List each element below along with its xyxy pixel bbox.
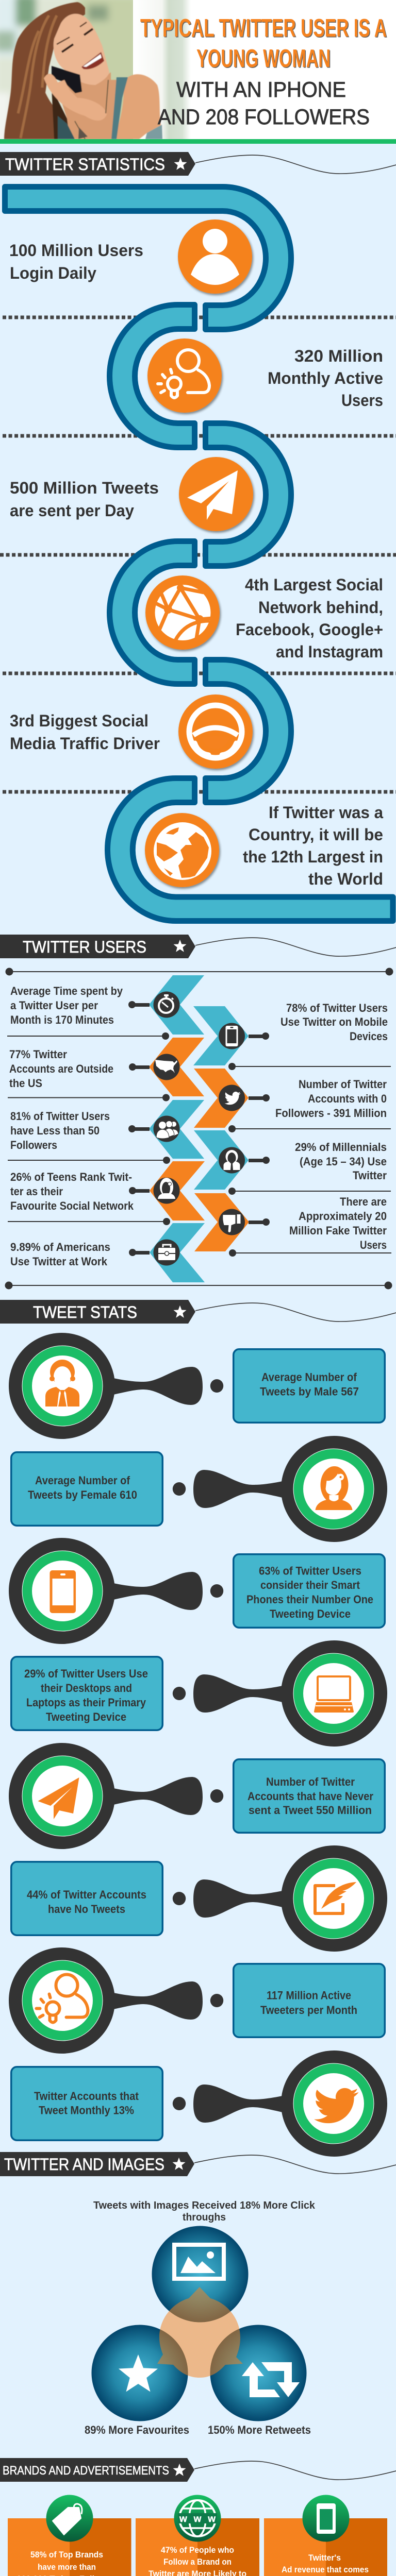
images headline: Tweets with Images Received 18% More Click	[93, 2200, 316, 2211]
text: no tweets: 44% of Twitter Accounts	[27, 1888, 146, 1901]
brand panel 2: 47% of People who	[161, 2545, 234, 2555]
stat: 500 million tweets: are sent per Day	[10, 501, 134, 520]
images labels: 150% More Retweets	[208, 2424, 311, 2436]
icon: price tag	[53, 2504, 82, 2535]
photo: woman on the phone	[0, 0, 162, 144]
icon: www globe	[178, 2500, 217, 2536]
user stats: left column: a Twitter User per	[10, 999, 98, 1012]
user stats: right column: Number of Twitter	[299, 1078, 387, 1091]
icon: person with bulb	[147, 338, 222, 413]
icon: retweet	[242, 2362, 300, 2397]
brand panel 3: Twitter's	[308, 2553, 341, 2563]
stat: 4th largest	[236, 575, 383, 661]
timeline top and bottom rules	[5, 969, 393, 1289]
user stats: right column: Use Twitter on Mobile	[280, 1015, 388, 1028]
brand panel 1: have more than	[38, 2562, 96, 2572]
text: desktop tweeting: Tweeting Device	[46, 1710, 126, 1723]
user stats: right column: Devices	[350, 1030, 388, 1043]
icon: network globe	[145, 575, 220, 650]
pan: accounts never tweeted	[9, 1743, 385, 1849]
pan: desktop tweeting	[11, 1640, 387, 1747]
icon: orange person with bulb	[36, 1974, 88, 2023]
user stats: left column: Accounts are Outside	[9, 1062, 113, 1075]
stat: if twitter was a country: If Twitter was a	[269, 803, 383, 822]
icon: teen girl	[154, 1178, 179, 1204]
icon: star	[119, 2354, 158, 2392]
section banner: twitter users	[0, 935, 396, 958]
pan: tweet monthly	[11, 2050, 387, 2157]
pan: smartphone tweeting	[9, 1538, 385, 1644]
icon: www globe: www	[179, 2514, 216, 2524]
pan: male tweets	[9, 1333, 385, 1439]
user stats: right column: Users	[360, 1239, 387, 1251]
text: smartphone tweeting: Phones their Number One	[246, 1593, 373, 1606]
text: active tweeters: 117 Million Active	[267, 1989, 351, 2002]
text: male tweets: Average Number of	[261, 1370, 357, 1384]
icon: image frame	[174, 2245, 224, 2279]
brand panel 3	[264, 2495, 387, 2576]
icon: phone	[50, 1570, 76, 1613]
stat: 320 million: Monthly Active	[268, 369, 383, 387]
icon: steering wheel	[178, 694, 253, 769]
images labels	[85, 2424, 311, 2436]
icon: group of users	[154, 1116, 179, 1142]
stat: if twitter was a country: the 12th Largest in	[243, 848, 383, 866]
user stats: left column: ter as their	[10, 1185, 63, 1198]
serpentine pipe	[5, 187, 393, 921]
stat: 3rd biggest	[10, 711, 160, 753]
brand panel 1	[8, 2495, 131, 2576]
user stats: left column: 9.89% of Americans	[10, 1241, 110, 1253]
icon: quill and page	[315, 1882, 356, 1913]
icon: orange twitter bird	[314, 2088, 358, 2123]
stat: 500 million tweets	[10, 479, 159, 520]
user stats: right column: Accounts with 0	[308, 1092, 387, 1105]
title: dark subheadline: AND 208 FOLLOWERS	[158, 105, 370, 129]
text: accounts never tweeted: sent a Tweet 550 Million	[249, 1804, 372, 1817]
user stats: left column: Use Twitter at Work	[10, 1255, 108, 1268]
text: female tweets	[28, 1474, 137, 1501]
text: female tweets: Tweets by Female 610	[28, 1488, 137, 1501]
user stats: right column: 78% of Twitter Users	[286, 1002, 388, 1014]
stat: if twitter was a country: the World	[308, 870, 383, 888]
text: smartphone tweeting: Tweeting Device	[270, 1607, 351, 1620]
text: accounts never tweeted	[248, 1775, 373, 1817]
user stats: right column: (Age 15 – 34) Use	[300, 1155, 387, 1168]
user stats: right column: There are	[340, 1195, 387, 1208]
stat: 100 million users: Login Daily	[10, 264, 96, 282]
section banner: brands and advertisements: BRANDS AND ADVERTISEMENTS	[3, 2464, 169, 2478]
user stats: left column: 77% Twitter	[9, 1048, 67, 1061]
user stats: right column: 29% of Millennials	[295, 1141, 387, 1154]
stat: 4th largest: and Instagram	[276, 642, 383, 661]
user stats: right column	[275, 1002, 388, 1251]
user stats: left column: Followers	[10, 1139, 57, 1151]
text: accounts never tweeted: Number of Twitter	[266, 1775, 355, 1788]
text: accounts never tweeted: Accounts that have Never	[248, 1790, 373, 1803]
stat: 3rd biggest: Media Traffic Driver	[10, 734, 160, 753]
text: active tweeters	[260, 1989, 357, 2016]
header	[0, 0, 396, 144]
images headline	[93, 2200, 316, 2223]
user stats: left column: the US	[9, 1077, 42, 1090]
section banner: brands and advertisements	[0, 2458, 396, 2482]
title: orange headline: YOUNG WOMAN	[196, 45, 331, 73]
stat: 320 million: 320 Million	[294, 347, 383, 365]
icon: paper plane	[179, 457, 253, 531]
user stats: left column: Favourite Social Network	[10, 1199, 134, 1212]
user stats: right column: Million Fake Twitter	[289, 1224, 387, 1237]
icon: millennial man	[219, 1147, 245, 1174]
user stats: left column: 81% of Twitter Users	[10, 1110, 110, 1123]
user stats: right column: Twitter	[353, 1169, 387, 1182]
stat: 320 million: Users	[341, 391, 383, 410]
text: no tweets: have No Tweets	[48, 1903, 125, 1916]
icon: thumbs down	[219, 1209, 245, 1235]
icon: mobile	[317, 2503, 336, 2534]
text: active tweeters: Tweeters per Month	[260, 2004, 357, 2016]
text: female tweets: Average Number of	[35, 1474, 130, 1487]
stat: 100 million users: 100 Million Users	[9, 241, 143, 260]
text: desktop tweeting: their Desktops and	[41, 1682, 132, 1694]
stat: if twitter was a country: Country, it will be	[249, 825, 383, 844]
user stats: left column	[9, 985, 134, 1268]
text: desktop tweeting: 29% of Twitter Users Use	[24, 1667, 148, 1680]
user stats: right column: Followers - 391 Million	[275, 1107, 387, 1120]
brand panel 1: 58% of Top Brands	[30, 2550, 103, 2560]
section banner: twitter and images	[0, 2152, 396, 2176]
text: smartphone tweeting	[246, 1564, 373, 1620]
brand panel 2	[136, 2495, 259, 2576]
text: tweet monthly: Tweet Monthly 13%	[39, 2104, 134, 2116]
stat: 320 million	[268, 347, 383, 410]
icon: twitter bird	[219, 1085, 245, 1111]
text: smartphone tweeting: 63% of Twitter Users	[259, 1564, 361, 1578]
icon: smartphone	[219, 1023, 245, 1049]
text: desktop tweeting	[24, 1667, 148, 1723]
text: male tweets: Tweets by Male 567	[260, 1385, 359, 1398]
right chevrons	[193, 1006, 249, 1251]
user stats: left column: have Less than 50	[10, 1124, 100, 1137]
stat: 4th largest: Facebook, Google+	[236, 620, 383, 639]
stat: 3rd biggest: 3rd Biggest Social	[10, 711, 148, 730]
stat: 100 million users	[9, 241, 143, 282]
venn: three circles	[92, 2226, 306, 2421]
venn: orange speech bubble	[157, 2287, 243, 2378]
brand panel 3: Ad revenue that comes	[282, 2565, 369, 2574]
text: desktop tweeting: Laptops as their Primary	[26, 1696, 146, 1709]
user stats: right column: Approximately 20	[299, 1210, 387, 1223]
pan: active tweeters	[9, 1947, 385, 2054]
icon: man	[45, 1360, 79, 1406]
text: smartphone tweeting: consider their Smart	[260, 1579, 360, 1591]
text: tweet monthly: Twitter Accounts that	[34, 2090, 139, 2103]
user stats: left column: 26% of Teens Rank Twit-	[10, 1171, 132, 1183]
connectors and row rules	[7, 1001, 391, 1257]
images headline: throughs	[183, 2212, 226, 2223]
text: male tweets	[260, 1370, 359, 1398]
icon: laptop	[314, 1676, 354, 1713]
pan: female tweets	[11, 1436, 387, 1542]
icon: user	[178, 219, 252, 294]
dotted row separators	[0, 317, 396, 792]
icon: briefcase	[154, 1240, 179, 1265]
section banner: tweet stats	[0, 1300, 396, 1324]
icon: woman	[316, 1466, 353, 1510]
title: dark subheadline: WITH AN IPHONE	[176, 77, 346, 101]
images labels: 89% More Favourites	[85, 2424, 189, 2436]
title: orange headline: YOUNG WOMAN	[197, 45, 331, 73]
section banner: tweet stats: TWEET STATS	[33, 1303, 137, 1321]
icon: stopwatch	[154, 991, 179, 1018]
icon: usa map	[154, 1054, 179, 1080]
icon: earth	[145, 813, 219, 887]
section banner: twitter and images: TWITTER AND IMAGES	[4, 2155, 164, 2174]
green divider bar	[0, 139, 396, 144]
text: tweet monthly	[34, 2090, 139, 2116]
icon: orange paper plane	[38, 1777, 79, 1819]
user stats: left column: Average Time spent by	[10, 985, 123, 997]
stat: 4th largest: Network behind,	[258, 598, 383, 617]
title: dark subheadline	[158, 77, 370, 129]
pan: no tweets	[11, 1845, 387, 1952]
brand panel 2: Follow a Brand on	[163, 2557, 232, 2567]
left chevrons	[149, 975, 205, 1282]
stat: if twitter was a country	[243, 803, 383, 888]
section banner: twitter statistics: TWITTER STATISTICS	[5, 155, 165, 174]
section banner: twitter statistics	[0, 152, 396, 176]
stat: 4th largest: 4th Largest Social	[245, 575, 383, 594]
text: no tweets	[27, 1888, 146, 1916]
stat: 500 million tweets: 500 Million Tweets	[10, 479, 159, 497]
user stats: left column: Month is 170 Minutes	[10, 1013, 114, 1026]
title: orange headline	[140, 14, 388, 73]
section banner: twitter users: TWITTER USERS	[23, 938, 146, 956]
